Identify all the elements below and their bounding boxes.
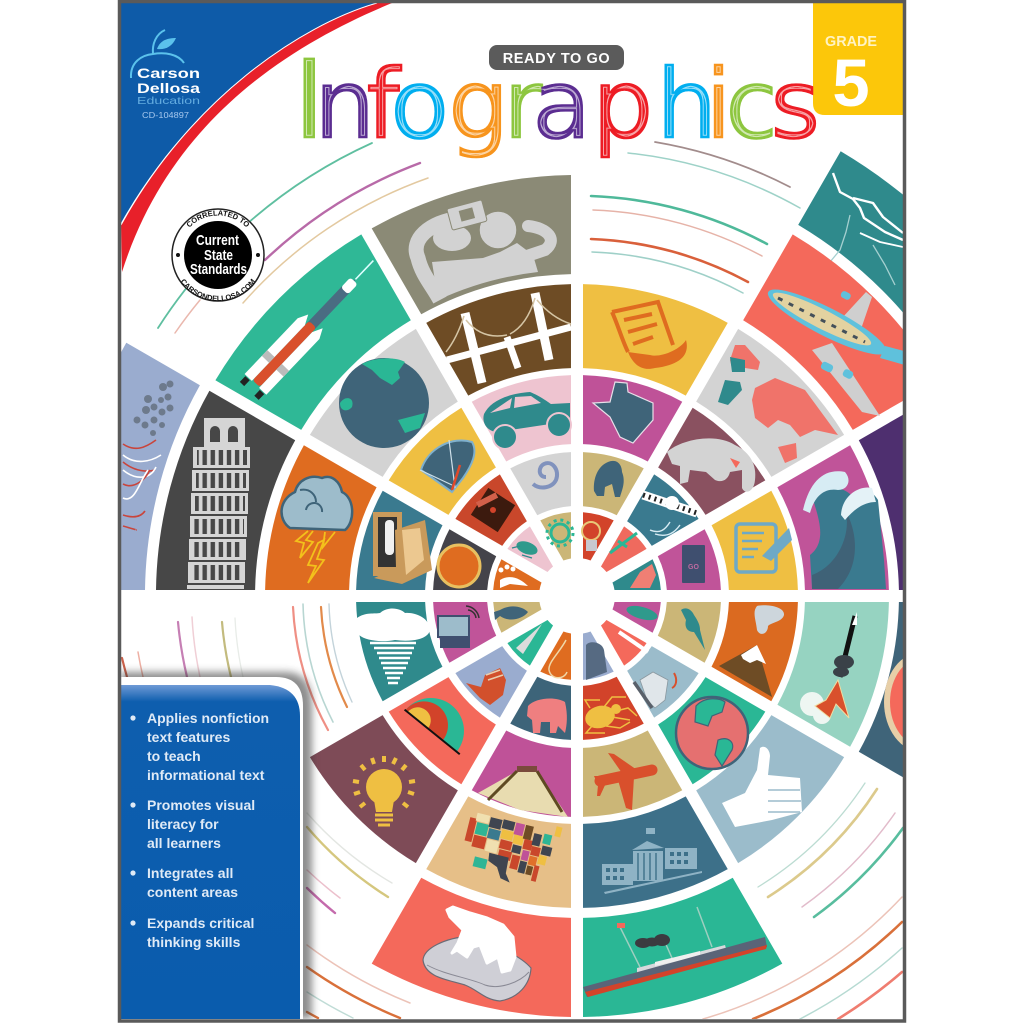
panel: pyramid temple — [472, 730, 571, 817]
panel: lightbulb — [310, 715, 458, 864]
badge: state standards: Standards — [190, 261, 247, 278]
panel: footprints — [493, 559, 542, 590]
panel: space rocket — [216, 234, 411, 430]
panel: airplane — [583, 730, 682, 817]
panel: gauge — [388, 408, 496, 515]
title: f — [366, 48, 400, 160]
panel: feature list: thinking skills — [147, 934, 241, 950]
panel: car — [472, 375, 572, 462]
title: g — [448, 48, 510, 160]
panel: suspension bridge — [426, 284, 572, 396]
panel: storm cloud — [265, 445, 377, 590]
panel: thumbs up — [696, 715, 844, 863]
logo: Carson Dellosa: Education — [137, 95, 200, 107]
panel: Earth from space — [658, 677, 766, 784]
logo: Carson Dellosa: Carson — [137, 65, 200, 81]
panel: stone head — [563, 630, 614, 687]
panel: volcano — [712, 602, 798, 701]
logo: Carson Dellosa: CD-104897 — [142, 111, 190, 120]
title: s — [770, 48, 821, 160]
panel: photographer — [372, 175, 571, 314]
panel: kettle — [447, 633, 531, 718]
title — [293, 36, 821, 164]
series pill: Ready to Go — [489, 45, 624, 70]
panel: laptop — [419, 579, 504, 663]
panel: feature list: content areas — [147, 884, 238, 900]
panel: mammoth — [658, 408, 766, 515]
title: r — [503, 48, 543, 160]
panel: document scroll — [583, 284, 728, 396]
panel: gorilla — [583, 452, 644, 515]
badge: state standards: CORRELATED TO — [186, 210, 249, 227]
panel: feature list: Applies nonfiction — [147, 710, 269, 726]
title: p — [592, 48, 654, 160]
panel: feature list: literacy for — [147, 816, 219, 832]
panel: feathers and birds — [121, 342, 200, 590]
logo: Carson Dellosa — [131, 30, 200, 120]
panel: elephant — [510, 677, 571, 740]
panel: lightning — [798, 151, 903, 312]
panel: tower — [503, 608, 554, 666]
panel: feature list: Integrates all — [147, 865, 233, 881]
title: i — [705, 48, 732, 160]
series pill: Ready to Go: READY TO GO — [503, 51, 610, 67]
blue corner banner — [121, 3, 392, 272]
panel: shell — [510, 438, 594, 523]
panel: lightbulb small — [582, 512, 614, 560]
panel: mummy sarcophagus — [356, 491, 442, 590]
panel: capitol building — [583, 796, 728, 908]
panel: bird — [658, 602, 721, 663]
panel: missile launch — [777, 602, 889, 747]
grade tab — [813, 3, 903, 121]
panel: book — [658, 529, 721, 590]
panel: gear sun — [540, 505, 591, 562]
panel: feature list: text features — [147, 729, 230, 745]
badge: state standards: CARSONDELLOSA.COM — [182, 278, 255, 301]
panel: satellite — [627, 474, 698, 546]
panel: floppy disk — [455, 466, 540, 550]
panel: sailing ship — [627, 646, 698, 718]
grade tab: GRADE — [825, 34, 877, 50]
panel: feature list: all learners — [147, 835, 221, 851]
panel: book: GO — [688, 564, 699, 571]
title: o — [390, 48, 449, 160]
logo: Carson Dellosa: Dellosa — [137, 80, 200, 96]
title: h — [656, 48, 717, 160]
panel: dark purple — [858, 414, 903, 590]
panel: leaf — [612, 602, 661, 633]
panel: airplane cutaway — [743, 234, 903, 430]
panel: fish small — [486, 582, 543, 633]
panel: wave — [777, 445, 889, 590]
panel: beach umbrella — [388, 677, 496, 784]
badge: state standards: State — [204, 247, 233, 264]
panel: USA map — [426, 796, 571, 908]
grade tab: 5 — [832, 46, 870, 121]
title: I — [293, 36, 325, 164]
panel: spider — [560, 669, 644, 754]
panel: fish — [611, 559, 668, 610]
cover border — [120, 2, 904, 1021]
panel: coral wedge — [589, 619, 648, 670]
panel: earth globe — [310, 329, 458, 477]
panel: feature list — [121, 672, 312, 1019]
panel: feature list: Promotes visual — [147, 797, 255, 813]
panel: Texas — [583, 375, 682, 462]
panel: sun — [433, 529, 496, 590]
panel: feature list: Expands critical — [147, 915, 254, 931]
panel: bug — [507, 522, 565, 573]
concentric arc lines — [122, 142, 903, 1019]
book cover — [121, 3, 903, 1019]
panel: feature list: informational text — [147, 767, 265, 783]
panel: leaning tower — [156, 391, 295, 590]
panel: shield edge — [858, 602, 903, 778]
panel: world map — [696, 329, 844, 477]
panel: paper and pen — [712, 490, 798, 590]
panel: tornado — [356, 602, 442, 702]
panel: coral pattern — [600, 526, 651, 584]
panel: steamship — [583, 878, 782, 1017]
badge: state standards: Current — [196, 232, 239, 249]
title: a — [532, 48, 591, 160]
badge: state standards — [171, 208, 265, 302]
title: n — [314, 48, 375, 160]
panel: feature list: to teach — [147, 748, 201, 764]
panel: water drop — [540, 632, 571, 680]
title: c — [725, 48, 778, 160]
panel: polar bear — [372, 878, 571, 1017]
